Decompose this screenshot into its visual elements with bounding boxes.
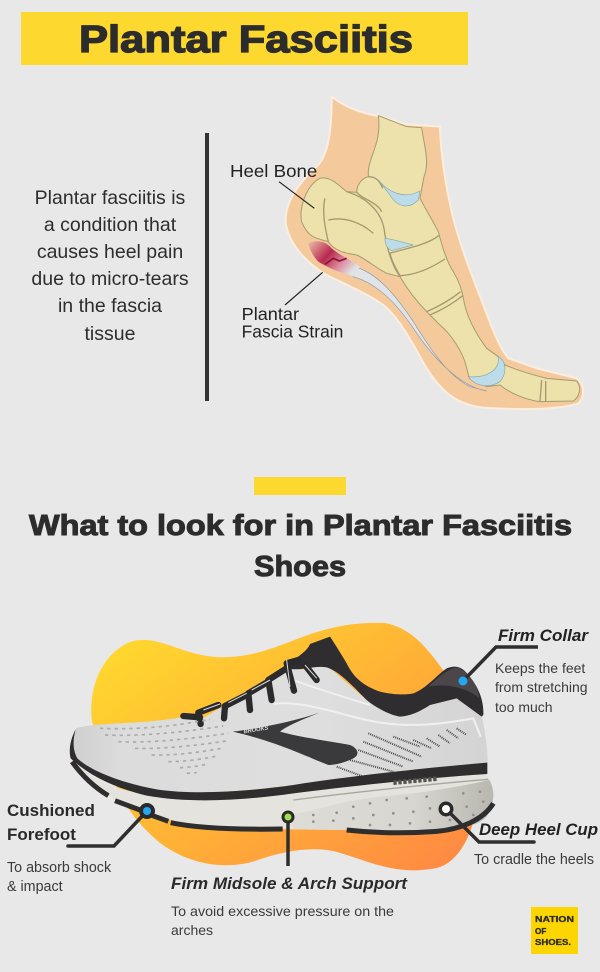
label: plantar fascia strain: Fascia Strain <box>242 321 343 341</box>
label: plantar fascia strain: Plantar <box>242 304 299 324</box>
mesh perforations forefoot <box>100 719 228 773</box>
running shoe <box>70 637 494 833</box>
brooks logo <box>233 713 357 765</box>
callout: deep heel cup: To cradle the heels <box>474 852 594 868</box>
laces <box>183 660 317 724</box>
brooks logo: BROOKS <box>243 725 269 735</box>
section heading <box>29 510 572 583</box>
midsole grey line <box>293 779 488 800</box>
callout: firm collar: from stretching <box>495 679 588 695</box>
midsole <box>71 758 494 832</box>
title: Plantar Fasciitis <box>79 19 413 61</box>
section heading: Shoes <box>254 551 346 583</box>
logo: nation of shoes: NATION <box>535 915 574 924</box>
callout: firm collar: Firm Collar <box>498 627 590 645</box>
section heading: What to look for in Plantar Fasciitis <box>29 510 572 542</box>
callout: firm collar: Keeps the feet <box>495 660 585 676</box>
upper <box>72 665 488 792</box>
callout: firm midsole and arch support: To avoid excessive pressure on the <box>171 903 394 919</box>
callout: cushioned forefoot <box>7 801 155 895</box>
logo: nation of shoes: SHOES. <box>535 938 571 947</box>
cartilage <box>378 180 505 386</box>
text block: definition: Plantar fasciitis is <box>35 187 186 209</box>
callout: firm collar <box>458 627 590 715</box>
callout: cushioned forefoot: Forefoot <box>7 825 76 844</box>
text block: definition <box>31 187 189 345</box>
collar interior <box>428 667 479 698</box>
label: heel bone <box>230 161 317 208</box>
label: plantar fascia strain <box>242 272 343 341</box>
text block: definition: causes heel pain <box>37 241 183 263</box>
yellow accent bar <box>254 477 346 495</box>
text block: definition: a condition that <box>44 214 177 236</box>
callout: cushioned forefoot: To absorb shock <box>7 860 112 876</box>
text block: definition: due to micro-tears <box>31 268 189 290</box>
callout: firm collar: too much <box>495 699 553 715</box>
bones silhouette <box>301 116 580 402</box>
foot skin <box>286 97 583 409</box>
gradient blob <box>91 623 479 870</box>
logo: nation of shoes <box>531 907 578 954</box>
fascia strain <box>308 241 360 277</box>
callout: deep heel cup: Deep Heel Cup <box>479 821 598 839</box>
collar <box>287 637 483 717</box>
foam heel <box>290 780 493 832</box>
midsole stripe <box>70 729 487 800</box>
text block: definition: tissue <box>85 323 135 345</box>
vertical divider <box>205 133 209 401</box>
plantar fascia <box>347 265 487 391</box>
foam holes <box>312 790 485 826</box>
foot anatomy illustration <box>230 97 583 409</box>
callout: cushioned forefoot: & impact <box>7 879 63 895</box>
callout: cushioned forefoot: Cushioned <box>7 801 95 820</box>
label: heel bone: Heel Bone <box>230 161 317 181</box>
mesh perforations rear <box>337 728 467 776</box>
logo: nation of shoes: OF <box>535 927 546 936</box>
bone seams <box>324 177 546 401</box>
title <box>21 12 468 65</box>
model label on stripe <box>393 779 437 783</box>
outsole <box>72 762 493 833</box>
callout: firm midsole and arch support <box>171 810 409 938</box>
callout: firm midsole and arch support: Firm Midsole & Arch Support <box>171 875 409 893</box>
callout: firm midsole and arch support: arches <box>171 922 213 938</box>
text block: definition: in the fascia <box>58 295 162 317</box>
upper panel highlights <box>273 680 481 737</box>
callout: deep heel cup <box>438 802 598 868</box>
